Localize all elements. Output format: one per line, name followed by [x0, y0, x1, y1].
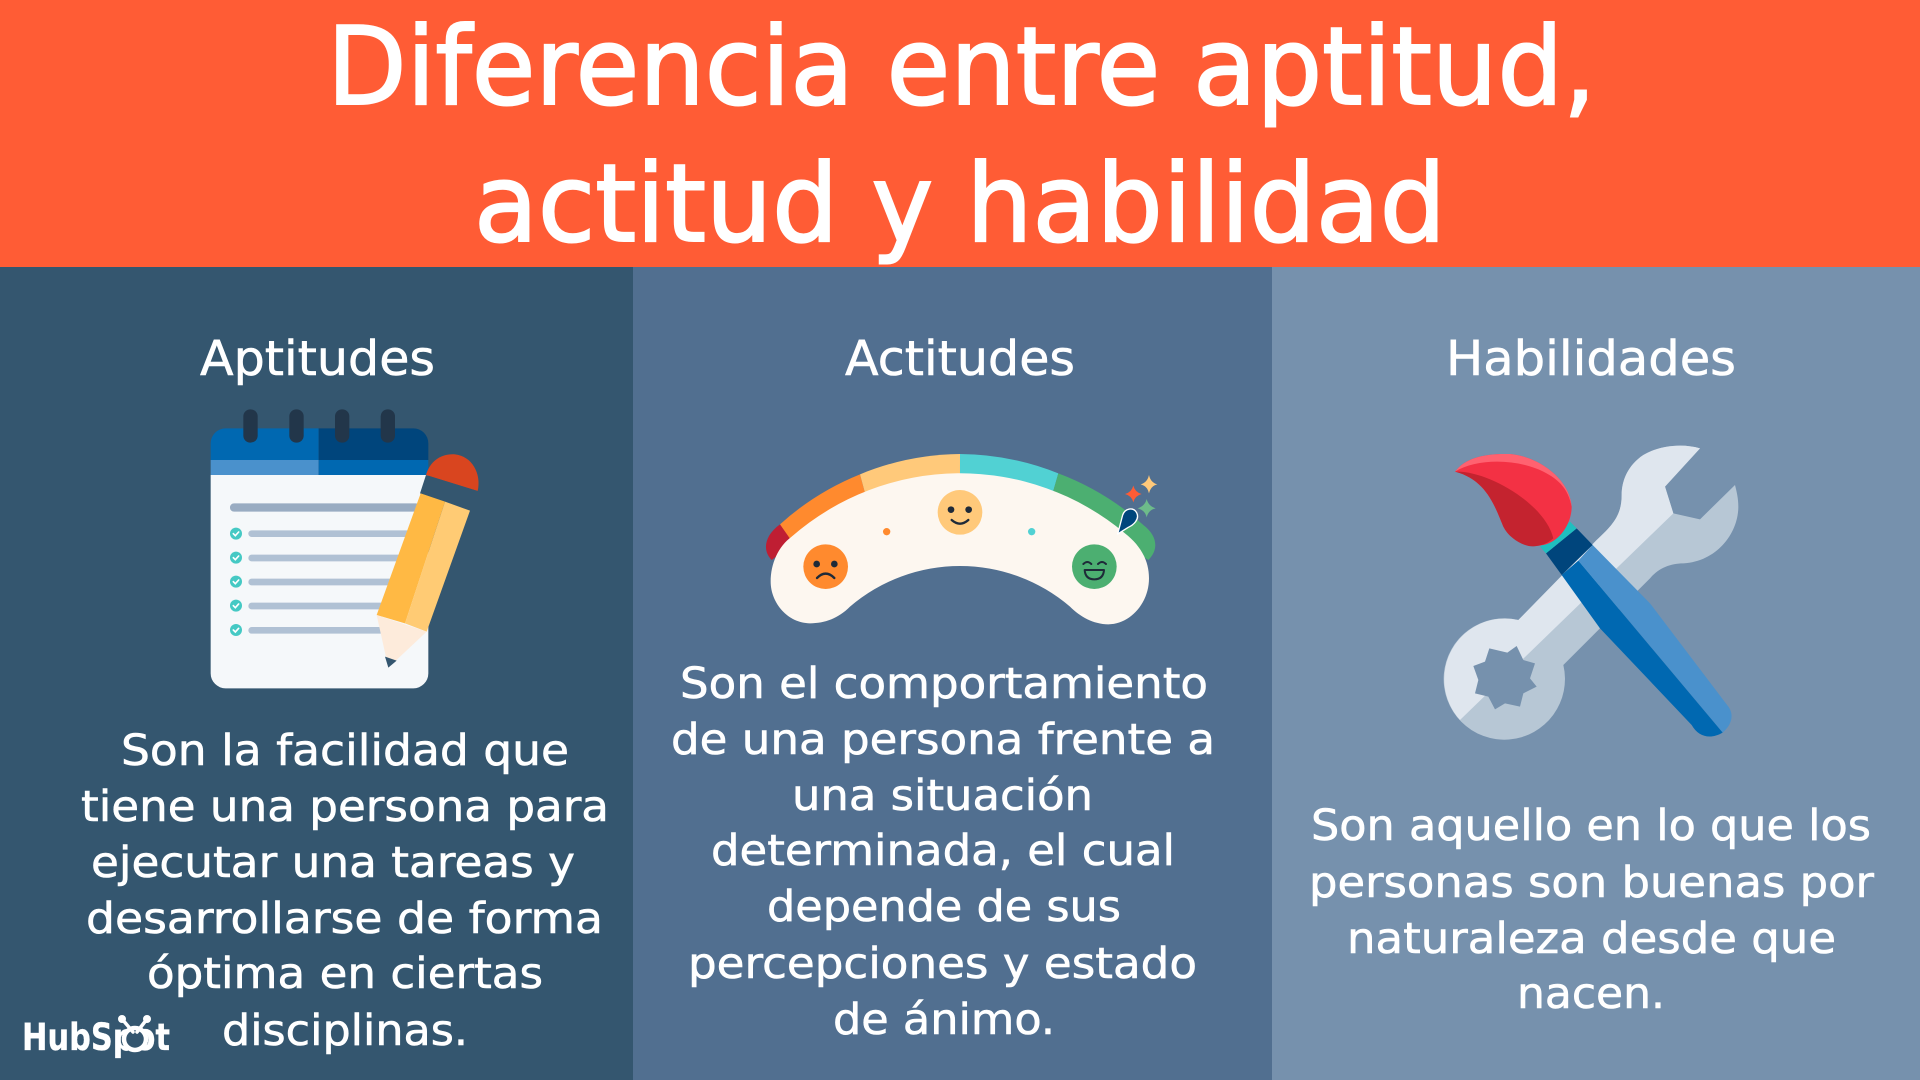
panel: actitudes — [633, 267, 1272, 1080]
body text: aptitudes: tiene una persona para — [81, 782, 609, 832]
body text: habilidades — [1309, 801, 1874, 1019]
title banner — [0, 0, 1920, 267]
body text: aptitudes — [81, 726, 609, 1056]
logo: HubSpot: HubSpot — [22, 1016, 170, 1059]
body text: aptitudes: ejecutar una tareas y — [91, 838, 575, 888]
body text: actitudes: de ánimo. — [833, 995, 1055, 1045]
title: Diferencia entre aptitud, — [327, 5, 1596, 130]
body text: actitudes: depende de sus — [767, 882, 1121, 932]
body text: habilidades: personas son buenas por — [1309, 858, 1874, 908]
body text: actitudes: percepciones y estado — [688, 939, 1197, 989]
panel: aptitudes — [0, 267, 633, 1080]
icon: mood gauge — [766, 454, 1157, 624]
title: actitud y habilidad — [474, 142, 1446, 267]
icon: wrench and paintbrush — [1444, 446, 1738, 740]
icon: notebook and pencil — [211, 409, 479, 688]
body text: aptitudes: disciplinas. — [222, 1006, 468, 1056]
body text: aptitudes: óptima en ciertas — [147, 949, 543, 999]
title — [327, 5, 1596, 267]
heading: actitudes: Actitudes — [845, 331, 1075, 387]
body text: habilidades: naturaleza desde que — [1347, 914, 1836, 964]
body text: habilidades: nacen. — [1517, 969, 1665, 1019]
panel: habilidades — [1272, 267, 1920, 1080]
heading: habilidades: Habilidades — [1446, 331, 1736, 387]
body text: actitudes: Son el comportamiento — [680, 659, 1208, 709]
body text: habilidades: Son aquello en lo que los — [1311, 801, 1871, 851]
body text: actitudes — [671, 659, 1215, 1045]
body text: actitudes: de una persona frente a — [671, 715, 1215, 765]
body text: aptitudes: desarrollarse de forma — [86, 894, 603, 944]
body text: actitudes: una situación — [792, 771, 1093, 821]
body text: actitudes: determinada, el cual — [711, 826, 1175, 876]
heading: aptitudes: Aptitudes — [200, 331, 435, 387]
body text: aptitudes: Son la facilidad que — [121, 726, 569, 776]
